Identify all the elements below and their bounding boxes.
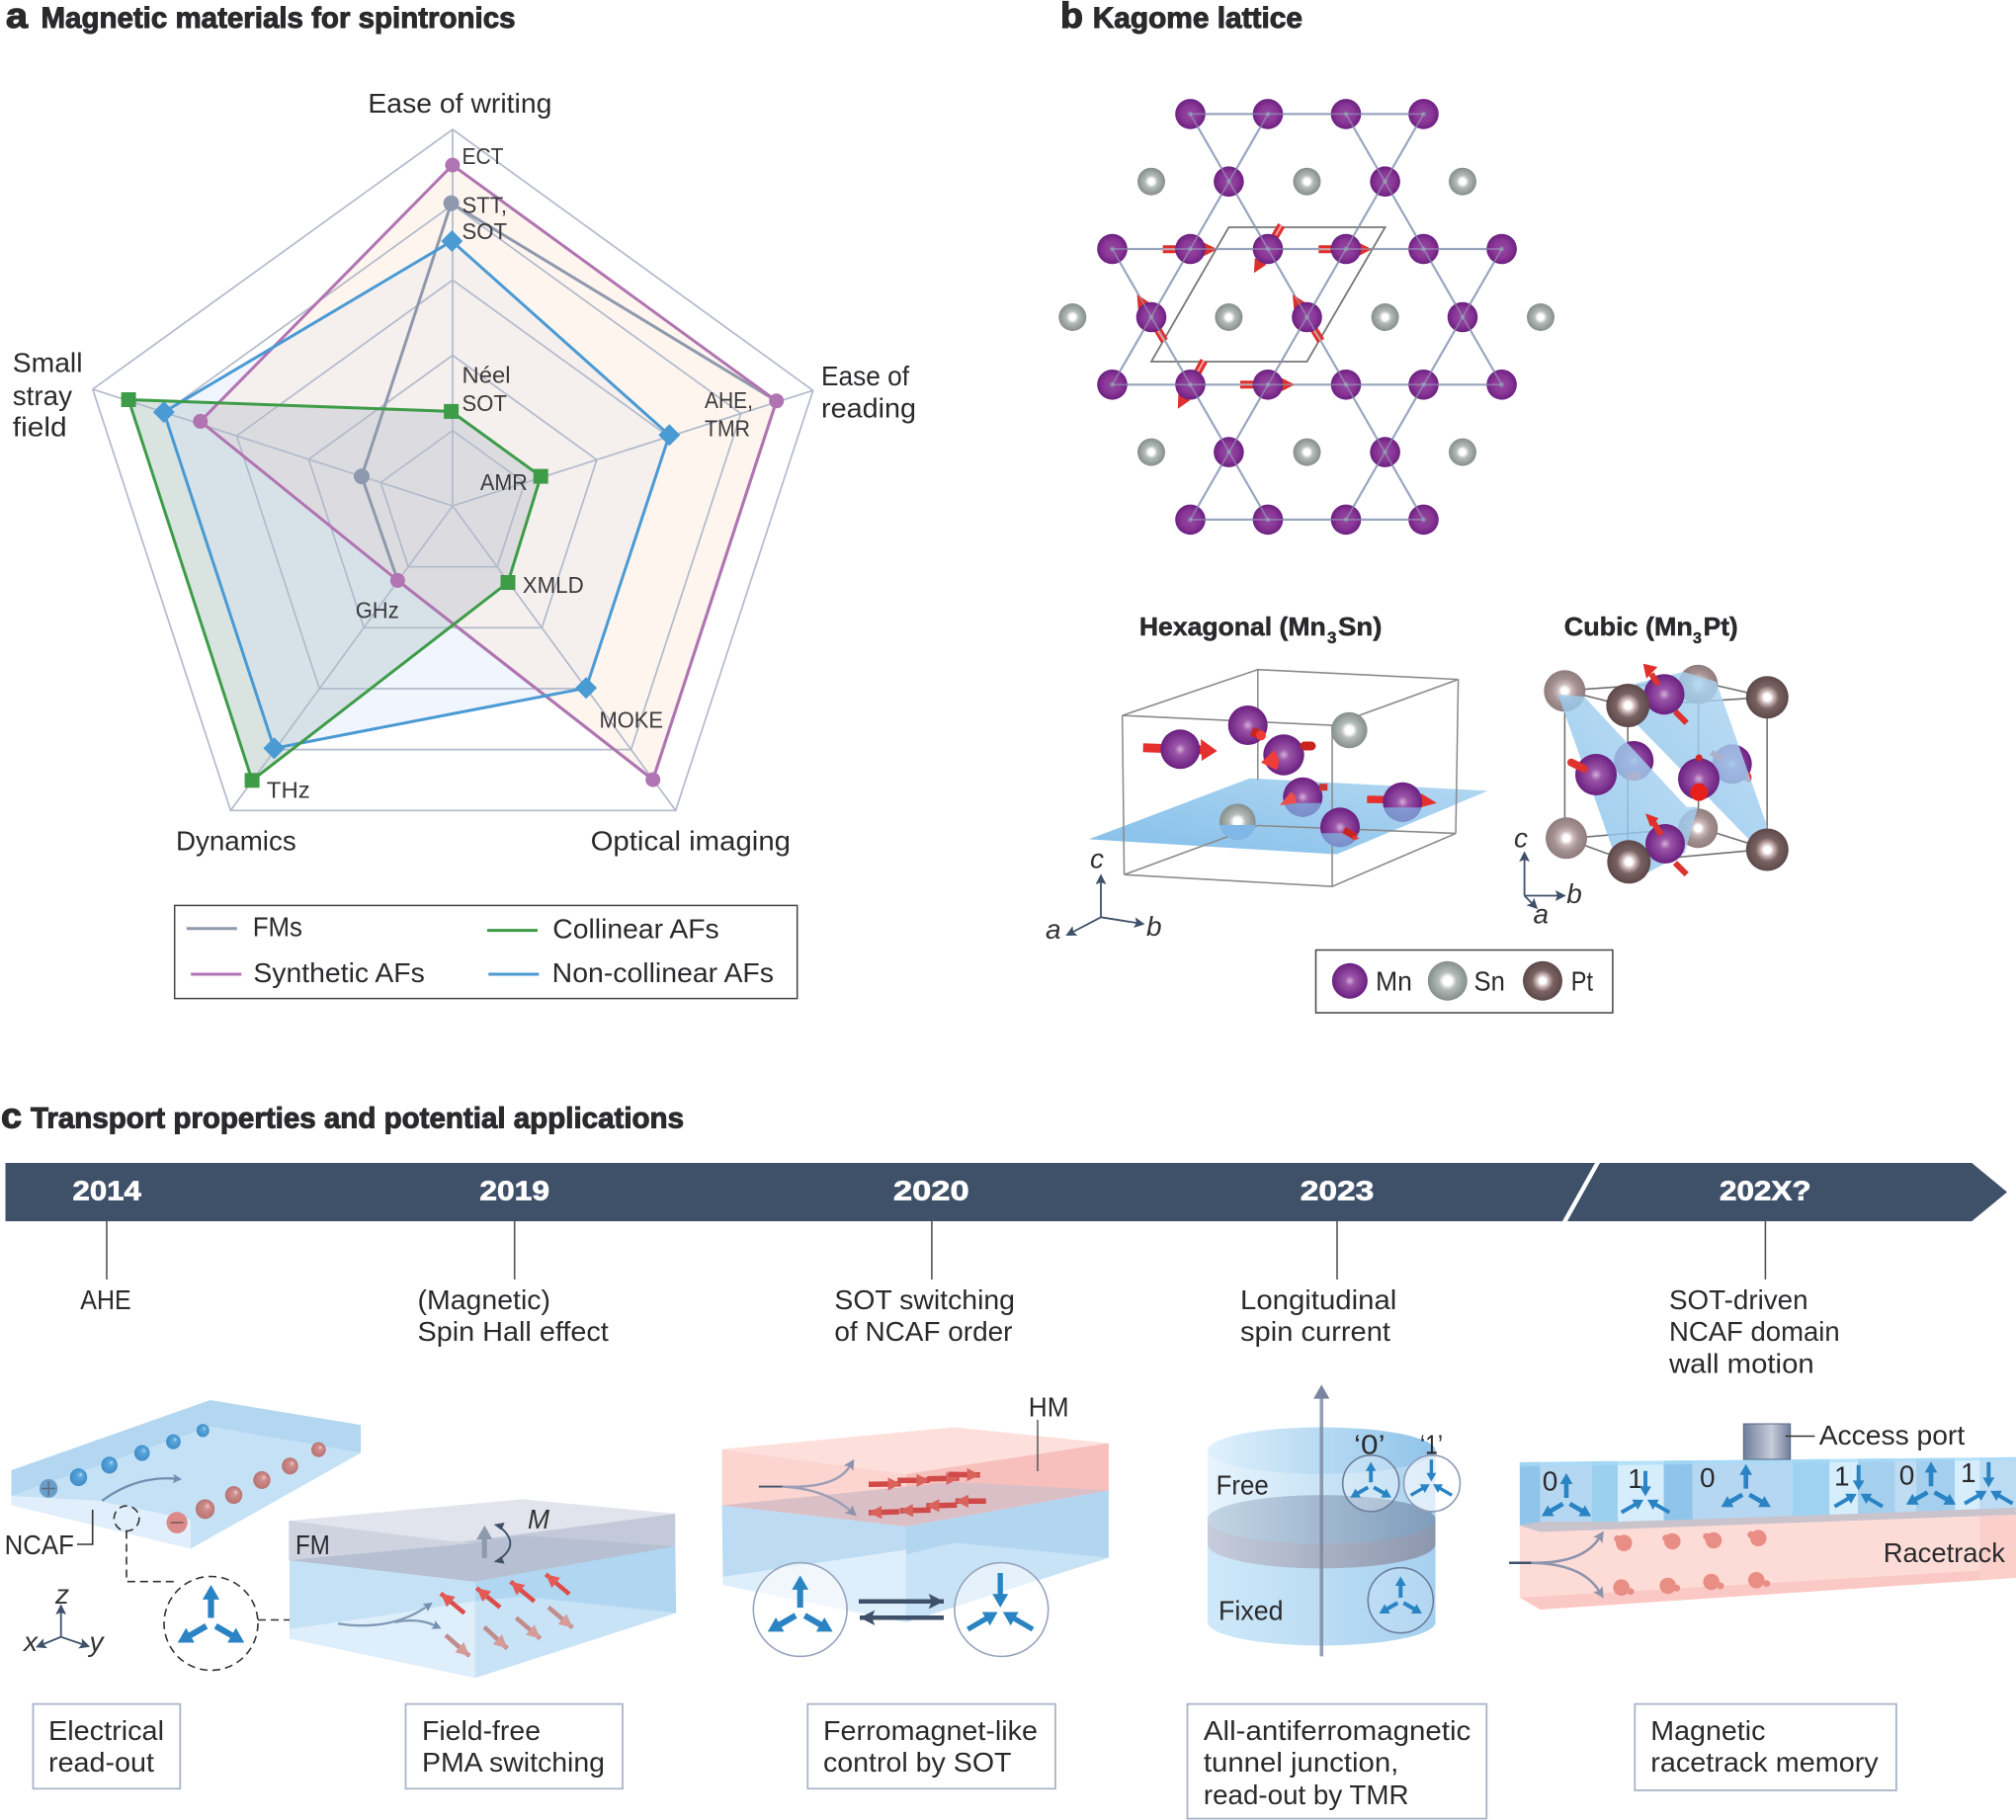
bit labels: 0	[1899, 1459, 1914, 1490]
axis labels	[13, 88, 916, 857]
access port	[1743, 1420, 1965, 1459]
box: electrical read-out: Electrical	[48, 1715, 164, 1746]
illustration: tunnel junction cylinder: Fixed	[1218, 1595, 1283, 1625]
box: electrical read-out: read-out	[48, 1747, 154, 1778]
legend b: Sn	[1474, 966, 1505, 997]
technique labels: THz	[267, 778, 310, 803]
domain spin icons	[1539, 1461, 2015, 1522]
switching arrows	[859, 1602, 944, 1617]
milestone descriptions: AHE	[80, 1284, 131, 1315]
box: ferromagnet-like control	[807, 1704, 1055, 1788]
box: ferromagnet-like control: Ferromagnet-like	[823, 1715, 1038, 1746]
series: FMs	[354, 196, 777, 780]
box: all-antiferromagnetic tunnel junction: read-out by TMR	[1204, 1779, 1409, 1810]
technique labels: GHz	[356, 597, 399, 622]
technique labels: AHE,	[705, 387, 753, 413]
timeline bar: 2014	[73, 1176, 141, 1205]
label: cubic: Cubic (Mn	[1564, 612, 1693, 641]
box: ferromagnet-like control: control by SOT	[823, 1747, 1012, 1778]
axis labels: reading	[821, 392, 916, 423]
panel b: kagome lattice	[1046, 0, 1789, 1013]
legend a: Synthetic AFs	[253, 957, 425, 988]
technique labels: AMR	[480, 469, 528, 495]
box: all-antiferromagnetic tunnel junction	[1188, 1704, 1486, 1819]
box: all-antiferromagnetic tunnel junction: All-antiferromagnetic	[1204, 1715, 1470, 1746]
heading c: c	[1, 1096, 22, 1136]
milestone descriptions: NCAF domain	[1669, 1316, 1840, 1347]
box: magnetic racetrack memory	[1635, 1704, 1896, 1790]
label: cubic: Pt)	[1704, 612, 1738, 641]
technique labels: MOKE	[599, 707, 663, 733]
heading a: Magnetic materials for spintronics	[42, 2, 516, 35]
legend a: FMs	[253, 912, 302, 943]
icon: free state 1	[1403, 1455, 1461, 1512]
icon: spin state B	[955, 1563, 1049, 1656]
label: cubic: 3	[1693, 630, 1702, 647]
timeline ticks	[107, 1221, 1765, 1280]
legend a: Non-collinear AFs	[552, 957, 774, 988]
timeline bar	[6, 1163, 2007, 1221]
illustration: tunnel junction cylinder: ‘0’	[1354, 1429, 1386, 1460]
box: field-free PMA switching: PMA switching	[422, 1747, 605, 1778]
axis labels: Ease of	[821, 361, 909, 391]
panel c: transport properties	[1, 1096, 2016, 1819]
radar chart	[13, 88, 916, 857]
milestone descriptions: SOT switching	[834, 1284, 1015, 1315]
illustration: field-free PMA switching: M	[528, 1504, 550, 1534]
label: hexagonal: Sn)	[1338, 612, 1382, 641]
kagome top-view lattice	[1058, 99, 1554, 535]
axes: hexagonal	[1046, 844, 1162, 945]
milestone descriptions: wall motion	[1668, 1349, 1814, 1379]
axes: hexagonal: c	[1090, 844, 1104, 874]
access port: Access port	[1819, 1420, 1965, 1450]
axis labels: Optical imaging	[591, 826, 791, 857]
axes: hexagonal: a	[1046, 914, 1061, 945]
bit labels: 0	[1543, 1465, 1557, 1496]
milestone descriptions: Spin Hall effect	[417, 1316, 609, 1347]
legend b: Mn	[1376, 966, 1412, 997]
panel a: magnetic materials radar	[6, 0, 916, 999]
timeline bar: 2020	[893, 1176, 969, 1205]
milestone descriptions: (Magnetic)	[417, 1284, 550, 1315]
milestone descriptions: spin current	[1240, 1316, 1390, 1347]
box: magnetic racetrack memory: racetrack memory	[1650, 1747, 1879, 1778]
bit labels: 1	[1834, 1460, 1850, 1491]
axis labels: Ease of writing	[368, 88, 551, 119]
illustration: racetrack memory: Racetrack	[1884, 1537, 2006, 1568]
illustration: tunnel junction cylinder: Free	[1217, 1470, 1269, 1501]
milestone descriptions: Longitudinal	[1240, 1284, 1396, 1315]
technique labels: TMR	[705, 416, 750, 442]
legend b	[1316, 951, 1613, 1013]
legend a: Collinear AFs	[552, 914, 719, 945]
technique labels: Néel	[462, 362, 510, 387]
dashed callout connecting slab to triangular spin texture	[114, 1506, 324, 1670]
axes: cubic: a	[1534, 898, 1549, 929]
milestone descriptions	[80, 1284, 1840, 1379]
icon: fixed layer state	[1368, 1568, 1433, 1633]
heading c: Transport properties and potential applications	[31, 1103, 684, 1135]
icon: triangular spin texture	[173, 1585, 249, 1650]
box: electrical read-out	[34, 1704, 180, 1788]
xyz axes: y	[87, 1626, 105, 1657]
technique labels: SOT	[462, 218, 507, 244]
illustration: tunnel junction cylinder: ‘1’	[1420, 1429, 1443, 1460]
series: collinear AFs	[122, 392, 548, 787]
xyz axes	[22, 1579, 105, 1657]
illustration: electrical read-out slab	[11, 1400, 361, 1549]
technique labels: STT,	[462, 192, 507, 217]
milestone descriptions: of NCAF order	[834, 1316, 1012, 1347]
axes: hexagonal: b	[1146, 911, 1162, 942]
icon: spin state A	[753, 1563, 847, 1656]
technique labels	[267, 143, 753, 803]
timeline bar: 2019	[479, 1176, 549, 1205]
box: field-free PMA switching: Field-free	[422, 1715, 541, 1746]
timeline bar: 202X?	[1720, 1176, 1810, 1205]
illustration: field-free PMA switching	[289, 1499, 676, 1678]
illustration: SOT switching heterostructure	[722, 1392, 1109, 1656]
box: all-antiferromagnetic tunnel junction: tunnel junction,	[1204, 1747, 1398, 1778]
label: hexagonal	[1139, 612, 1382, 647]
label: NCAF: NCAF	[5, 1530, 74, 1560]
cubic unit cell	[1544, 664, 1789, 883]
legend b: Pt	[1571, 966, 1593, 997]
illustration: tunnel junction cylinder	[1208, 1384, 1461, 1656]
technique labels: ECT	[462, 143, 504, 169]
illustration: field-free PMA switching: FM	[295, 1530, 330, 1560]
timeline bar: 2023	[1301, 1176, 1374, 1205]
axes: cubic	[1514, 822, 1582, 929]
technique labels: SOT	[462, 390, 507, 416]
label: NCAF	[5, 1510, 93, 1560]
series: synthetic AFs	[193, 158, 784, 787]
illustration: racetrack memory	[1509, 1420, 2016, 1610]
axis labels: stray	[13, 380, 72, 411]
box: magnetic racetrack memory: Magnetic	[1650, 1715, 1765, 1746]
illustration: SOT switching heterostructure: HM	[1029, 1392, 1069, 1423]
xyz axes: x	[22, 1626, 39, 1657]
label: hexagonal: 3	[1327, 628, 1336, 647]
box: field-free PMA switching	[405, 1704, 623, 1788]
axis labels: Dynamics	[176, 826, 296, 857]
hexagonal unit cell	[1089, 670, 1488, 886]
bit labels: 1	[1961, 1457, 1976, 1488]
technique labels: XMLD	[523, 572, 584, 598]
legend a	[175, 905, 798, 999]
axis labels: Small	[13, 348, 82, 378]
bit labels: 0	[1700, 1462, 1716, 1493]
bit labels: 1	[1628, 1463, 1643, 1494]
label: cubic	[1564, 612, 1738, 647]
spin accumulation dots	[1613, 1530, 1770, 1596]
current arrows	[1509, 1538, 1599, 1591]
heading b: Kagome lattice	[1093, 2, 1302, 35]
series: non-collinear AFs	[153, 230, 680, 759]
icon: free state 0	[1343, 1455, 1399, 1512]
label: hexagonal: Hexagonal (Mn	[1139, 612, 1326, 641]
axis labels: field	[13, 412, 67, 443]
milestone descriptions: SOT-driven	[1669, 1284, 1808, 1315]
axes: cubic: c	[1514, 822, 1528, 853]
axes: cubic: b	[1566, 878, 1582, 909]
xyz axes: z	[54, 1579, 69, 1610]
application boxes	[34, 1704, 1896, 1819]
bit labels	[1543, 1457, 1976, 1496]
